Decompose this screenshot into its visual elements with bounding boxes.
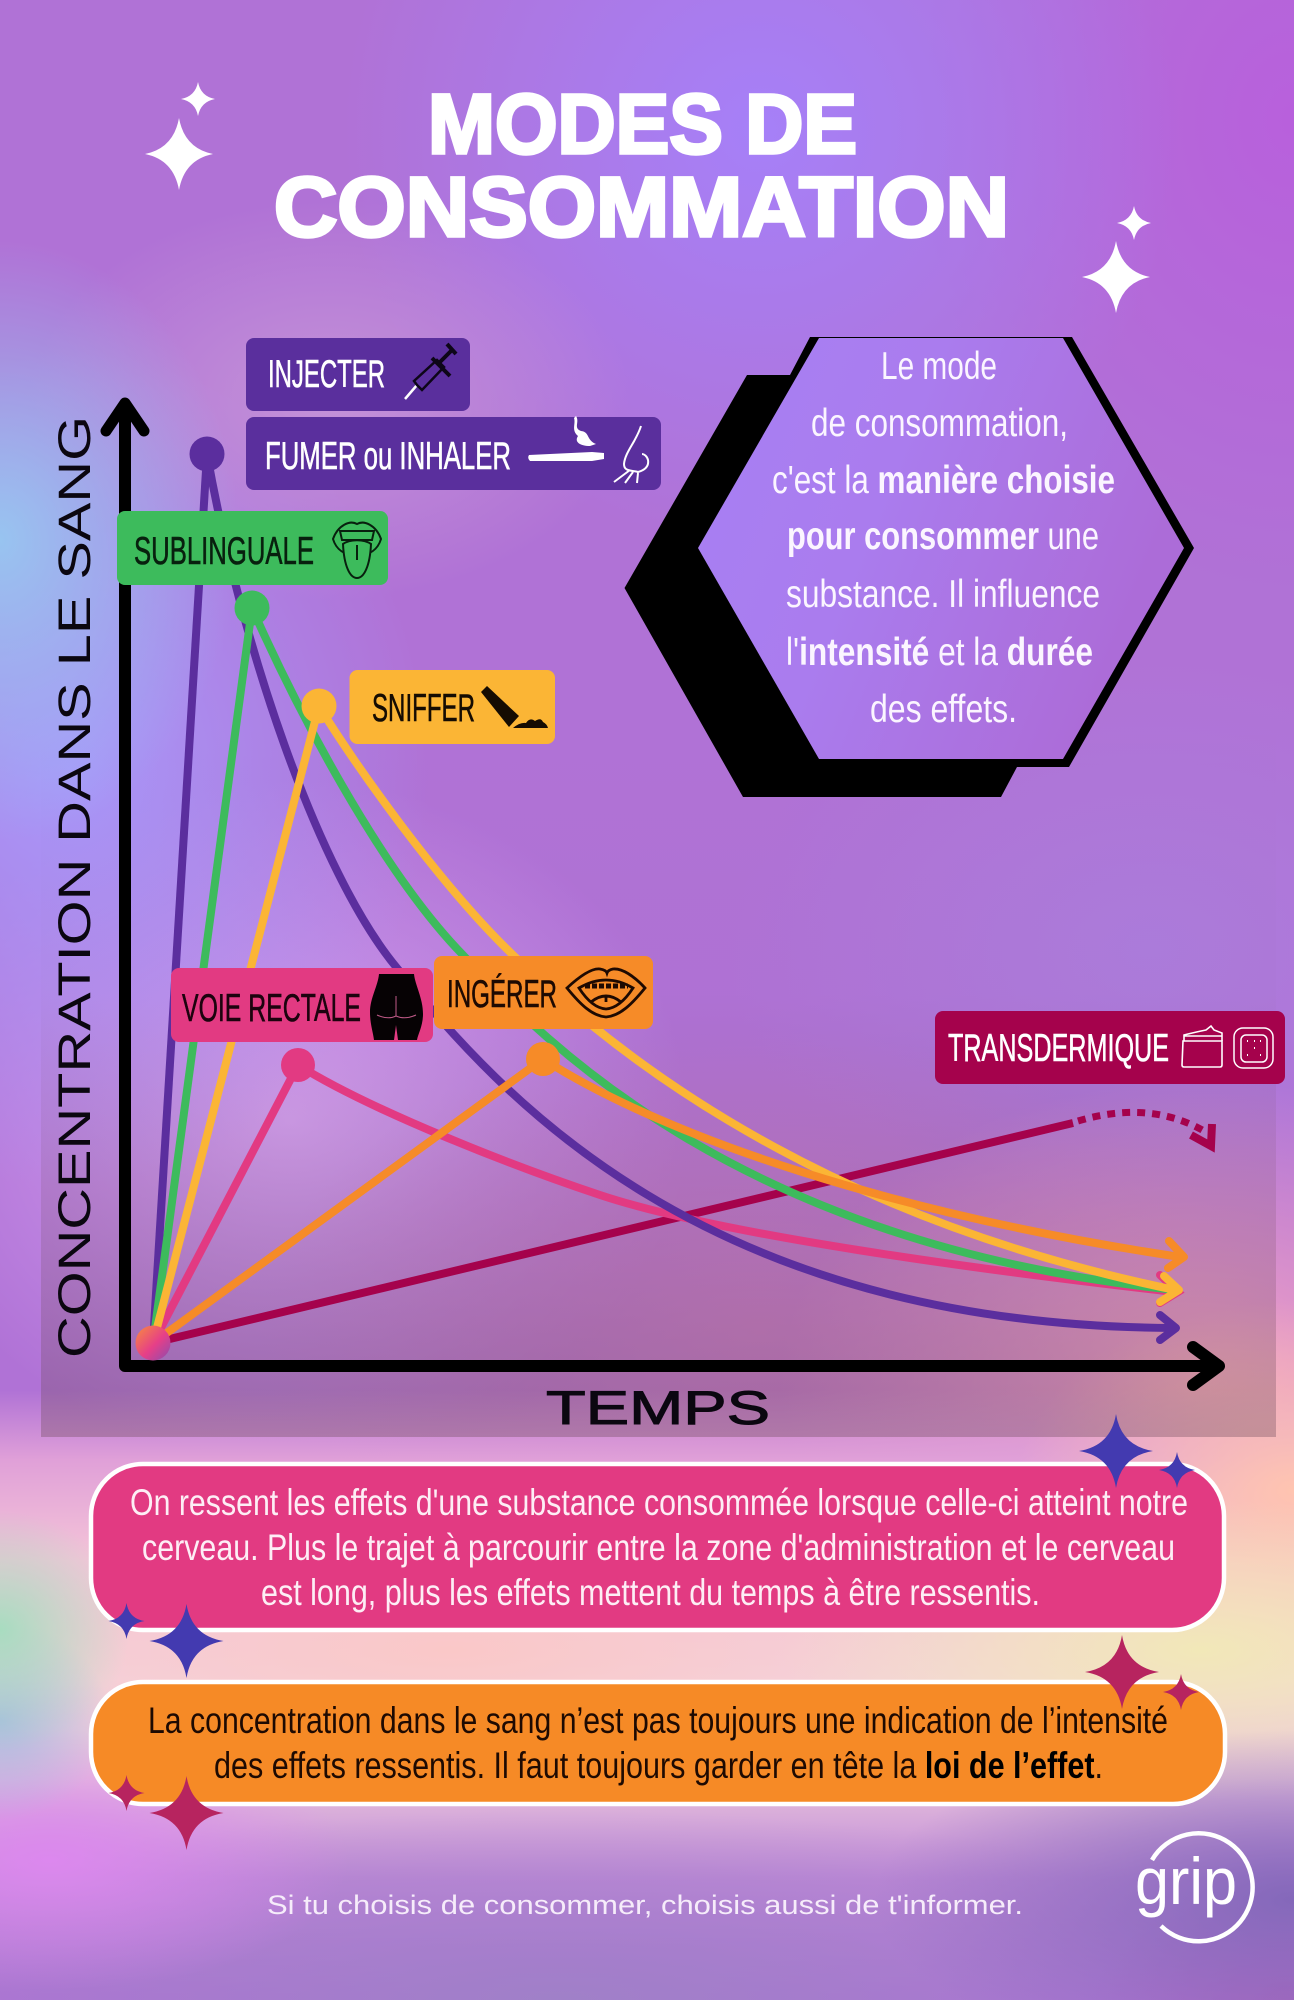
footer tagline: Si tu choisis de consommer, choisis aussi de t'informer. — [267, 1890, 1023, 1920]
peak points — [190, 436, 560, 1082]
panel: definition hexagon — [624, 337, 1194, 797]
icon: mouth — [567, 969, 645, 1017]
label: fumer ou inhaler: FUMER ou INHALER — [265, 435, 511, 478]
label: injecter — [246, 338, 470, 411]
curve: sublinguale — [153, 608, 1175, 1343]
definition text: l'intensité et la durée — [786, 631, 1093, 674]
callout: pink pill: est long, plus les effets mettent du temps à être ressentis. — [261, 1572, 1040, 1613]
definition text: pour consommer une — [787, 515, 1099, 558]
origin point — [136, 1326, 170, 1360]
curve: injecter — [153, 454, 1176, 1343]
label: voie rectale — [171, 968, 433, 1042]
hexagon black shadow — [624, 337, 1194, 797]
label: fumer ou inhaler — [246, 416, 661, 490]
hexagon body — [698, 338, 1184, 759]
label: sniffer — [350, 670, 555, 744]
sparkles: blue stars — [108, 1414, 1195, 1678]
definition text — [772, 345, 1115, 731]
callout: pink pill — [91, 1464, 1224, 1630]
label: transdermique — [935, 1011, 1285, 1084]
label: transdermique: TRANSDERMIQUE — [948, 1027, 1169, 1070]
icon: syringe — [405, 344, 456, 399]
label: ingerer — [434, 956, 653, 1029]
curve: ingerer — [153, 1059, 1184, 1343]
curve: voie rectale — [153, 1065, 1178, 1343]
chart: concentration over time — [49, 403, 1219, 1434]
definition text: c'est la manière choisie — [772, 459, 1115, 502]
title — [274, 77, 1009, 254]
label: ingerer: INGÉRER — [447, 973, 557, 1016]
icon: straw and powder — [481, 686, 548, 728]
logo: grip — [1135, 1833, 1253, 1941]
icon: tongue — [333, 523, 381, 578]
sparkles: title white stars — [145, 82, 1151, 313]
logo: grip: grip — [1135, 1844, 1237, 1918]
y axis label: CONCENTRATION DANS LE SANG — [49, 416, 100, 1358]
definition text: substance. Il influence — [786, 573, 1100, 616]
callout: orange pill: des effets ressentis. Il faut toujours garder en tête la loi de l’effet. — [214, 1745, 1103, 1786]
label: injecter: INJECTER — [268, 353, 385, 396]
axes with arrows — [106, 403, 1219, 1385]
label: sublinguale: SUBLINGUALE — [134, 530, 314, 573]
curve: sniffer — [153, 706, 1179, 1343]
icon: patch — [1234, 1028, 1273, 1068]
icon: cream jar — [1182, 1026, 1222, 1067]
definition text: des effets. — [870, 688, 1017, 731]
curve: transdermique — [153, 1112, 1212, 1343]
chart panel backdrop — [41, 700, 1276, 1437]
sparkles: crimson stars — [108, 1635, 1199, 1850]
icon: nose — [614, 426, 648, 483]
x axis label: TEMPS — [546, 1381, 770, 1434]
definition text: Le mode — [881, 345, 997, 388]
title: MODES DE — [428, 77, 857, 171]
label: sublinguale — [117, 511, 388, 585]
title: CONSOMMATION — [274, 160, 1009, 254]
callout: orange pill — [91, 1682, 1225, 1804]
label: sniffer: SNIFFER — [372, 687, 475, 730]
icon: joint and smoke — [528, 416, 604, 461]
definition text: de consommation, — [811, 402, 1068, 445]
label: voie rectale: VOIE RECTALE — [182, 987, 361, 1030]
icon: buttocks — [370, 974, 423, 1040]
